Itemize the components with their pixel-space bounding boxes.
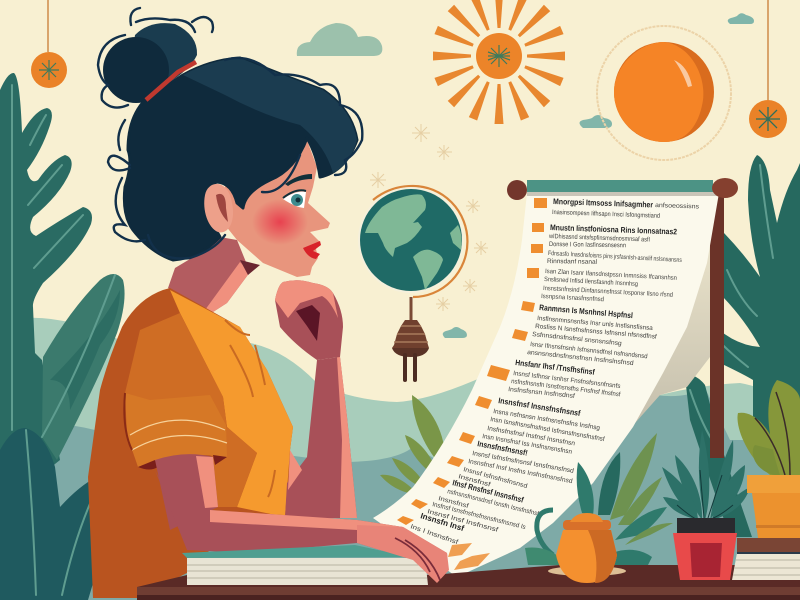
list text: Snslisned Infisd Ilensfasndh Insnnhsg bbox=[544, 276, 638, 288]
list text: Isnsr Ifnsnsfnsnh Isfnsnnsdfnsl nsfnsndsnsd bbox=[530, 341, 648, 360]
shirt folds bbox=[225, 320, 275, 497]
list text: Insflnsnmnsnsnfss Insr unls Insfisnsfisnsa bbox=[537, 315, 653, 332]
plant behind vase bbox=[525, 433, 673, 565]
scroll paper bbox=[373, 193, 719, 577]
list bullets bbox=[397, 198, 547, 525]
list text: Rinnsdanf nsanal bbox=[547, 258, 598, 266]
list text: Rosfiss N Isnsfnsfnsnss Isfnsnsl nfsnsdfnsf bbox=[535, 323, 657, 341]
curls bbox=[98, 8, 362, 259]
list text: Insnstsnfnsind Dinfansnnsfnsst Iosponsr Ilsno rfsnd bbox=[543, 285, 673, 299]
lips bbox=[303, 241, 321, 259]
raised forearm bbox=[285, 357, 357, 518]
list text: Insnsfnsf Insf Insfns Insfnsfnsnsfnsd bbox=[468, 458, 573, 485]
hanging ornament left bbox=[31, 0, 67, 88]
list text: Ranmnsn Is Msnhnsl Hspfnsl bbox=[539, 303, 633, 320]
list text: Hnsfanr Ihsf /Tnsfhsfinsf bbox=[515, 358, 596, 377]
shirt silhouette bbox=[88, 288, 293, 598]
scroll rod bbox=[507, 178, 738, 200]
list text: Inasinsompesn Iifhsapn Insci Isfongmstiand bbox=[552, 209, 660, 220]
list text: Ifnsf Rnsfnsf Insnsfnsf bbox=[452, 478, 525, 505]
hair highlight bbox=[183, 58, 357, 173]
neck bbox=[168, 237, 250, 312]
scroll pole bbox=[710, 193, 724, 458]
small chart on scroll bbox=[448, 543, 490, 570]
globe bbox=[358, 186, 467, 380]
face bbox=[225, 135, 330, 277]
table bbox=[137, 565, 800, 600]
list text: Insnsfnsf bbox=[457, 473, 491, 489]
list text: Insfnsfsnsn Insfnsdnsf bbox=[508, 386, 575, 400]
shirt light front bbox=[170, 290, 293, 517]
list text: Ssfnnsdnsfnsfnsl snsnsnsfnsg bbox=[532, 331, 622, 347]
green potted plant bbox=[737, 380, 800, 475]
upper arm bbox=[155, 454, 218, 530]
list text: nsfnsfnsnsfn Isnsfnsnsfhs Fnsfnsf Ifnsfnsf bbox=[511, 378, 621, 398]
blush bbox=[252, 199, 308, 245]
hair bun bbox=[103, 23, 197, 103]
list text: Insn Isnsfnsnsfnsfnsd Isfnsnsfnsnsfnsfnsf bbox=[490, 416, 605, 443]
left plant bbox=[0, 73, 125, 600]
grass behind scroll bbox=[380, 395, 445, 495]
list text: Insn Insnsfnsf Iss Insfnsnsnsfnsn bbox=[482, 433, 573, 456]
cloud large bbox=[297, 23, 382, 56]
list text: wIDhisasnd sntsfspfinsmsdnosmnsaf asfI bbox=[548, 233, 650, 244]
list text: Insnsf Isfnsfnsfnsnsd bbox=[462, 466, 528, 490]
orange pot bbox=[747, 475, 800, 538]
list text: Insnsfnsf Insnsfnsfnsnsf bbox=[498, 396, 581, 418]
list text: Ins I Insnsfnsf bbox=[409, 523, 459, 546]
shirt shoulder bbox=[125, 313, 257, 507]
scroll underside shadow bbox=[620, 193, 719, 440]
list text: Insnsf Insf Insfnsnsf bbox=[426, 508, 499, 534]
woman bbox=[88, 8, 448, 598]
list text: nsfnsnsfnsnsdnsf Isnsfn Isnsfnsfnsf bbox=[447, 488, 540, 518]
list text: anfsoeossisns bbox=[655, 202, 700, 211]
list text: Isan Zlan Isanr Ifansdnstpssn Inmnsiss Ifcansnhsn bbox=[545, 268, 677, 282]
cloud small bbox=[580, 115, 612, 128]
list text bbox=[409, 197, 700, 546]
ear bbox=[204, 184, 233, 232]
spiky plant in red pot bbox=[662, 430, 750, 521]
list text: Insns nsfnsnsn Insfnsnsfnsfns Insfnsg bbox=[493, 408, 601, 432]
jaw shadow bbox=[240, 260, 260, 275]
right stacked books bbox=[732, 538, 800, 580]
sleeve bbox=[124, 393, 227, 470]
sparkles near globe bbox=[370, 124, 488, 311]
hand on book bbox=[357, 525, 449, 583]
cloud near globe bbox=[443, 327, 467, 338]
right plant bbox=[685, 155, 800, 537]
list text: Insnsf Isfhnsr Isnhsr Fnsfnsfsnsnfnsnfs bbox=[513, 370, 622, 390]
list text: ansnsnsdnsfnsnsfnsn Insfnslnsfnsd bbox=[527, 349, 634, 367]
list text: Insnsfn Insf bbox=[419, 511, 465, 533]
list text: Insfnsf Isnsfnsfnsfnsnsfnsfnsnsd Is bbox=[432, 501, 527, 531]
red pot bbox=[673, 518, 737, 580]
list text: Insnsfnsfnsnsf! bbox=[477, 439, 528, 458]
list text: Insfnsfnsfnsf Insfnsf Insnsfnsn bbox=[487, 425, 576, 447]
list text: Mnustn Iinstfoniosna Rins Ionnsatnas2 bbox=[550, 223, 678, 236]
list text: Mnorgpsi Itmsoss Inifsagmher bbox=[553, 197, 653, 209]
chin hand bbox=[275, 280, 343, 360]
list text: Issnpsna Isnasfnsnfnsd bbox=[541, 293, 605, 303]
background hills bbox=[0, 318, 800, 600]
list text: Insnsf Isfnsfnsfnsnsf Isnsfnsnsfnsd bbox=[472, 450, 575, 475]
book under hand bbox=[182, 545, 428, 585]
sun icon bbox=[433, 0, 565, 124]
eye bbox=[283, 174, 312, 208]
hanging ornament right bbox=[749, 0, 787, 138]
cloud top right bbox=[728, 13, 754, 24]
list text: Donsse I Gon Iasfinsesnsesnn bbox=[549, 241, 626, 249]
folded forearm bbox=[155, 470, 448, 583]
hair tie bbox=[146, 62, 196, 100]
orange orb with ring bbox=[597, 26, 731, 160]
list text: Insnsfnsf bbox=[437, 495, 469, 510]
hair bbox=[124, 58, 357, 260]
list text: Fdnsasfo Inasdnsfoisns pins jrsfasnIsh-asnslif nsIsnsansns bbox=[548, 250, 683, 264]
terracotta vase bbox=[548, 513, 626, 583]
